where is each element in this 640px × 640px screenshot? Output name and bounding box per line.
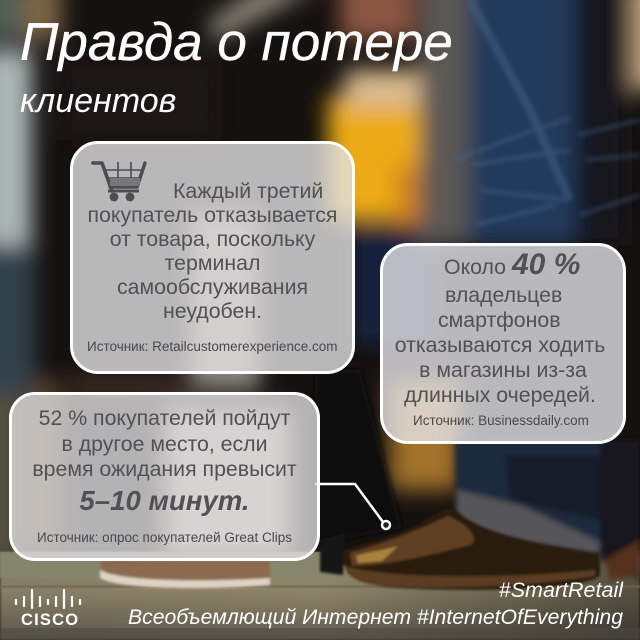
tagline: Всеобъемлющий Интернет #InternetOfEverything [128,606,623,629]
icon: Cisco bars [14,588,82,610]
title: Правда о потере [20,13,453,72]
subtitle: клиентов [20,82,176,120]
jeans [455,440,640,560]
main text: от товара, поскольку [110,227,315,251]
main text: владельцев [445,283,562,307]
main text: 5–10 минут. [79,485,250,516]
dark shoe [320,533,345,575]
panel: self-service terminal [70,141,355,374]
main text: 40 % [512,248,580,281]
jeans wrinkles [455,0,640,225]
wordmark: CISCO [21,611,79,629]
main text: время ожидания превысит [32,457,297,481]
panel: waiting time [9,392,320,561]
icon: shopping cart [91,161,147,202]
light shoe [100,559,270,586]
main text [395,248,605,407]
main text: смартфонов [438,308,561,332]
source: Источник: Businessdaily.com [413,413,589,428]
main text: покупатель отказывается [88,203,337,227]
floor [0,552,640,640]
main text: в другое место, если [62,432,267,456]
main text: 52 % покупателей пойдут [39,406,290,430]
dark trousers [315,370,402,542]
main text: терминал [165,251,260,275]
main text: отказываются ходить [395,333,605,357]
main text: Около [444,255,506,279]
source: Источник: Retailcustomerexperience.com [87,339,337,354]
main text: самообслуживания [117,275,308,299]
main text: Каждый третий [173,179,323,203]
bottom shade [0,628,640,640]
main text [88,179,337,323]
hashtag: SmartRetail: #SmartRetail [499,578,623,602]
panel: smartphone owners [380,243,626,444]
logo: Cisco [14,588,82,629]
brown shoe [342,509,600,590]
main text: в магазины из-за [419,358,587,382]
main text [32,406,297,516]
main text: длинных очередей. [404,383,596,407]
source: Источник: опрос покупателей Great Clips [37,530,292,545]
main text: неудобен. [163,299,262,323]
